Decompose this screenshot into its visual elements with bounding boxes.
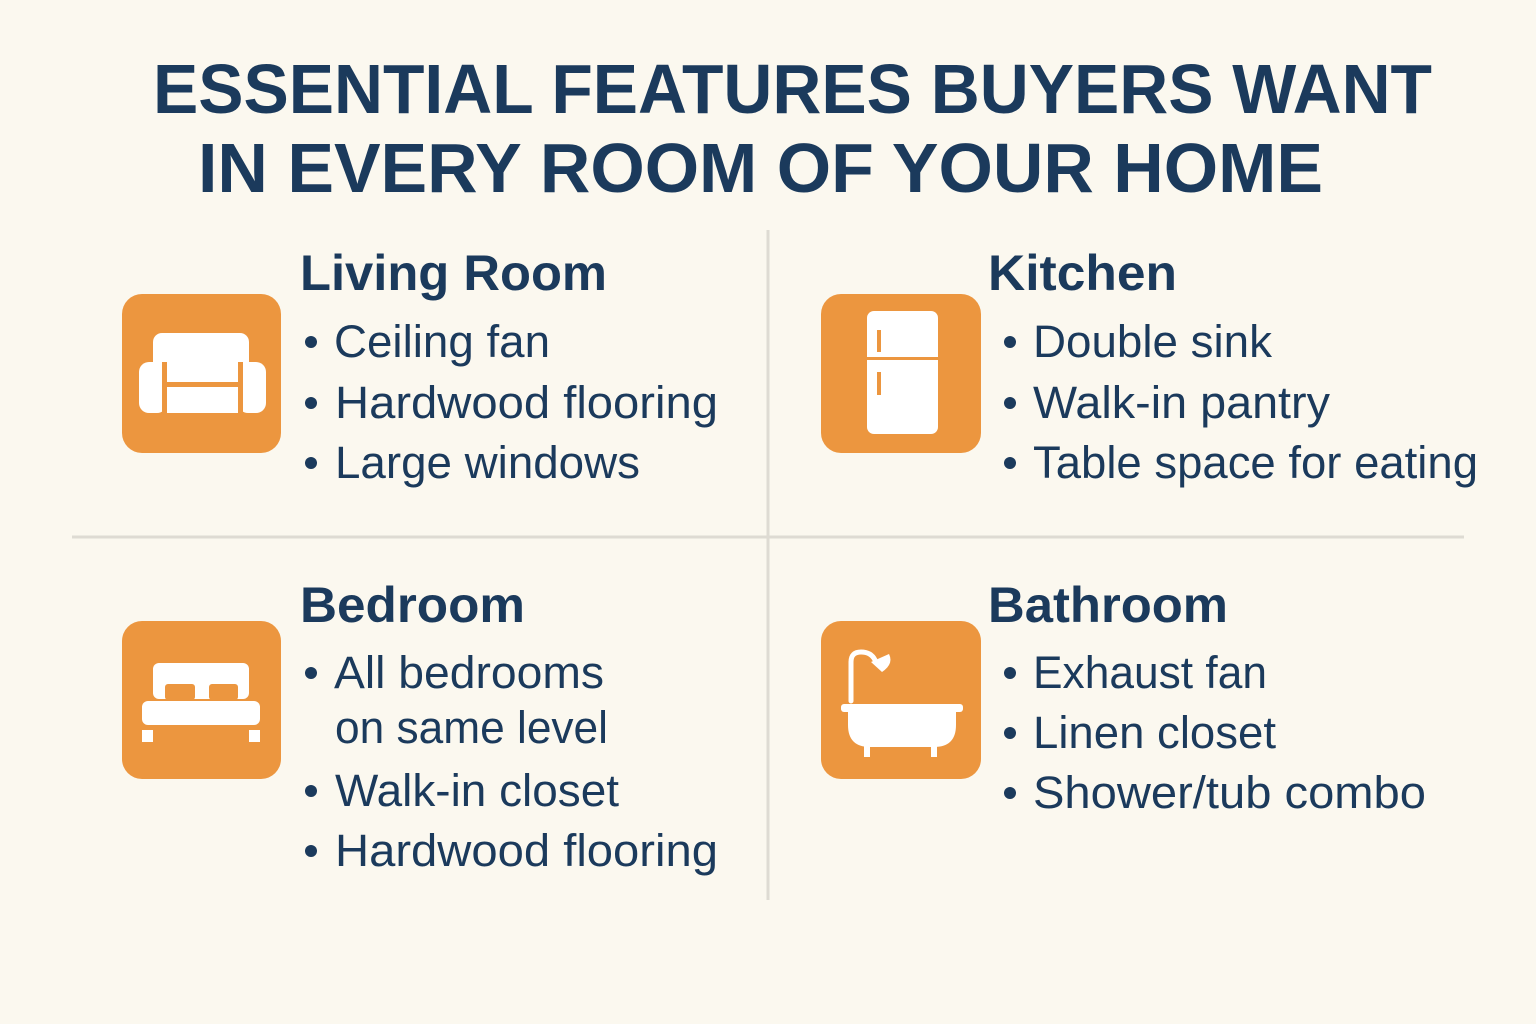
heading: kitchen: Kitchen	[988, 245, 1177, 301]
list: bedroom	[305, 647, 718, 876]
list: kitchen: Walk-in pantry	[1033, 377, 1331, 428]
list: bathroom	[1004, 647, 1426, 818]
heading: bathroom: Bathroom	[988, 577, 1228, 633]
heading: living room: Living Room	[300, 245, 607, 301]
list: bedroom: on same level	[335, 702, 608, 753]
list: bedroom: Hardwood flooring	[335, 825, 718, 876]
list: living room: Ceiling fan	[334, 316, 550, 367]
title: ESSENTIAL FEATURES BUYERS WANT	[153, 50, 1432, 128]
heading: bedroom: Bedroom	[300, 577, 525, 633]
list: bathroom: Shower/tub combo	[1033, 767, 1426, 818]
title: IN EVERY ROOM OF YOUR HOME	[198, 129, 1323, 207]
list: kitchen: Table space for eating	[1033, 437, 1478, 488]
icon: bed	[122, 621, 281, 779]
icon: bathtub	[821, 621, 981, 779]
list: living room	[305, 316, 718, 488]
panel: bathroom	[821, 577, 1426, 818]
icon: fridge	[821, 294, 981, 453]
list: kitchen: Double sink	[1033, 316, 1272, 367]
panel: bedroom	[122, 577, 718, 876]
list: bathroom: Linen closet	[1033, 707, 1276, 758]
title	[153, 50, 1432, 207]
list: bedroom: Walk-in closet	[335, 765, 619, 816]
panel: kitchen	[821, 245, 1478, 488]
list: bedroom: All bedrooms	[334, 647, 604, 698]
list: living room: Hardwood flooring	[335, 377, 718, 428]
icon: sofa	[122, 294, 281, 453]
list: living room: Large windows	[335, 437, 640, 488]
panel: living room	[122, 245, 718, 488]
list: kitchen	[1004, 316, 1478, 488]
list: bathroom: Exhaust fan	[1033, 647, 1267, 698]
